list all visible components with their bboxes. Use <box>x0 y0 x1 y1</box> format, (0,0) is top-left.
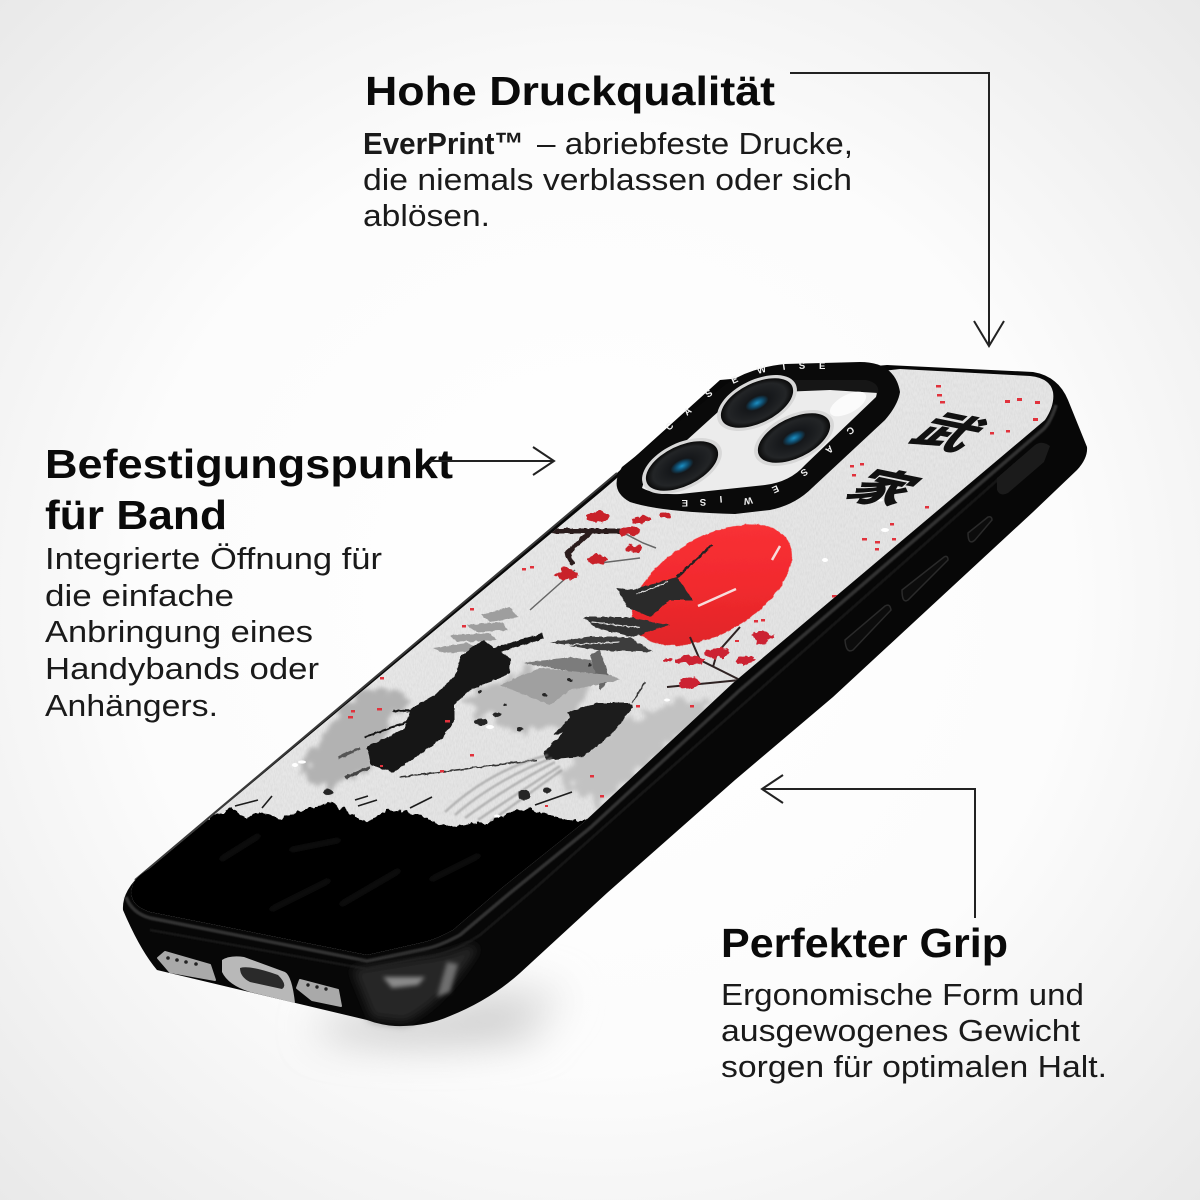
case body <box>123 365 1087 1026</box>
CASEWISE ring lettering <box>664 361 856 508</box>
callout: Befestigungspunkt <box>45 441 453 723</box>
right speaker grille <box>297 980 341 1006</box>
CASEWISE ring lettering: W <box>743 494 753 506</box>
heading: Hohe Druckqualität <box>365 68 775 114</box>
description <box>45 541 382 723</box>
description: Anbringung eines <box>45 614 313 649</box>
CASEWISE ring lettering: A <box>682 405 694 418</box>
kanji print: 武 <box>896 398 1008 461</box>
heading: Befestigungspunkt <box>45 441 453 487</box>
cherry branch lower <box>662 627 774 687</box>
camera window <box>642 382 877 494</box>
arrow: to attachment point <box>430 447 554 475</box>
left speaker grille <box>158 952 215 980</box>
CASEWISE ring lettering: I <box>719 493 723 504</box>
case rim second ridge <box>150 460 1020 969</box>
CASEWISE ring lettering: E <box>682 497 688 508</box>
case rim highlight <box>126 405 1056 961</box>
heading <box>45 441 453 538</box>
charging port <box>222 956 295 1003</box>
ink splatter <box>323 664 592 800</box>
description: – abriebfeste Drucke, <box>537 126 853 161</box>
CASEWISE ring lettering: E <box>770 482 780 495</box>
grey mist trees <box>300 668 715 805</box>
black ink ground <box>131 802 588 955</box>
CASEWISE ring lettering: C <box>844 424 856 437</box>
heading: für Band <box>45 492 227 538</box>
ink spikes <box>235 792 572 808</box>
red petal dots <box>348 385 1040 807</box>
paper ground <box>131 369 1054 955</box>
description <box>363 126 853 233</box>
pagoda <box>500 545 712 705</box>
side slot <box>997 443 1050 494</box>
description: Anhängers. <box>45 688 218 723</box>
CASEWISE ring lettering: A <box>823 443 835 456</box>
arrow: to case side <box>762 775 975 918</box>
heading: Perfekter Grip <box>721 920 1008 966</box>
CASEWISE ring lettering: E <box>730 374 740 387</box>
left rim line <box>135 473 617 880</box>
phone drop shadow <box>315 986 565 1044</box>
description: ablösen. <box>363 198 490 233</box>
printed artwork <box>131 369 1054 955</box>
description: EverPrint™ <box>363 126 524 161</box>
CASEWISE ring lettering: C <box>664 420 676 433</box>
lens top <box>708 363 806 443</box>
kanji print: 家 <box>830 454 942 517</box>
white specks <box>292 498 889 818</box>
paper grain <box>216 370 1048 824</box>
description: Integrierte Öffnung für <box>45 541 382 576</box>
phone case <box>100 350 1100 1026</box>
description: Handybands oder <box>45 651 319 686</box>
CASEWISE ring lettering: S <box>798 466 810 478</box>
cherry branch top <box>530 512 670 610</box>
description <box>721 977 1107 1084</box>
lens right <box>745 398 843 478</box>
CASEWISE ring lettering: I <box>782 362 786 373</box>
CASEWISE ring lettering: E <box>819 361 825 372</box>
flash <box>826 387 870 421</box>
window shadow <box>745 380 878 393</box>
side buttons <box>845 517 992 651</box>
sword wind streaks <box>445 755 562 822</box>
description: die einfache <box>45 578 234 613</box>
samurai silhouette left <box>338 636 543 778</box>
CASEWISE ring lettering: S <box>798 361 806 372</box>
corner gloss <box>352 945 478 1022</box>
distant pagoda <box>433 607 518 653</box>
description: Ergonomische Form und <box>721 977 1084 1012</box>
lens left <box>633 426 731 506</box>
CASEWISE ring lettering: S <box>703 388 715 400</box>
callout: Perfekter Grip <box>721 920 1107 1084</box>
CASEWISE ring lettering: S <box>700 496 706 507</box>
callout: Hohe Druckqualität <box>363 68 853 233</box>
description: ausgewogenes Gewicht <box>721 1013 1080 1048</box>
CASEWISE ring lettering: W <box>756 364 767 377</box>
description: die niemals verblassen oder sich <box>363 162 852 197</box>
camera island <box>617 361 900 514</box>
description: sorgen für optimalen Halt. <box>721 1049 1107 1084</box>
arrow: to print surface <box>790 73 1004 346</box>
island frame <box>617 362 900 514</box>
red sun <box>632 523 793 646</box>
ink texture <box>220 835 480 910</box>
samurai silhouette right <box>400 682 645 777</box>
kanji print <box>830 398 1008 517</box>
